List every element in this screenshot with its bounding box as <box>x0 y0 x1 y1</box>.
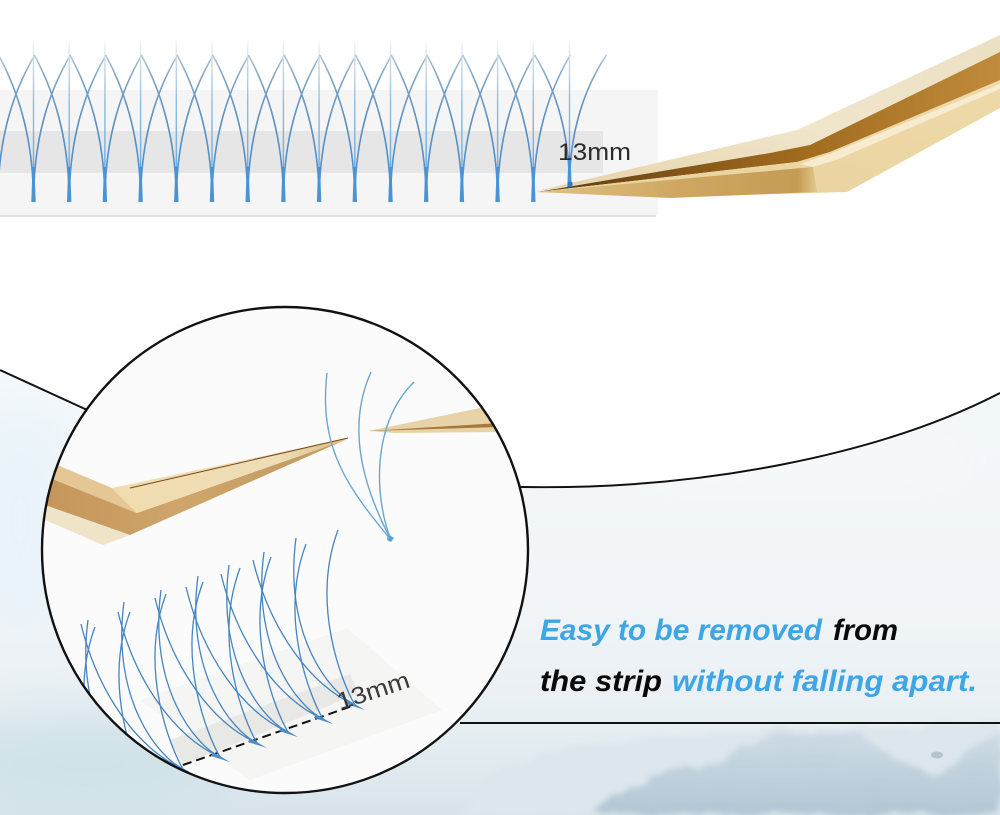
caption line 2: the strip <box>540 665 662 698</box>
lower lash fans <box>80 530 365 774</box>
top lash fans row <box>0 37 607 202</box>
caption line 2: without falling apart. <box>672 665 977 698</box>
caption line 1: from <box>833 614 898 647</box>
label: 13mm rotated: 13mm <box>334 667 413 716</box>
label: 13mm top: 13mm <box>558 139 631 166</box>
single lash fan <box>325 372 414 542</box>
caption line 2 <box>540 665 977 698</box>
lower strip card <box>140 628 442 780</box>
dashed strip line <box>183 705 355 765</box>
panel: top lash strip card <box>0 90 658 217</box>
circle outline <box>42 307 528 793</box>
right gold tweezers <box>368 408 496 433</box>
bottom divider line <box>460 722 1000 724</box>
left gold tweezers <box>45 438 348 545</box>
panel: watercolor lower background <box>0 370 1000 815</box>
caption line 1: Easy to be removed <box>540 614 823 647</box>
top gold tweezers <box>537 35 1000 198</box>
divider curve <box>0 370 1000 487</box>
lower strip grey band <box>170 674 358 765</box>
panel: magnified circle <box>10 307 528 807</box>
caption <box>540 614 977 698</box>
